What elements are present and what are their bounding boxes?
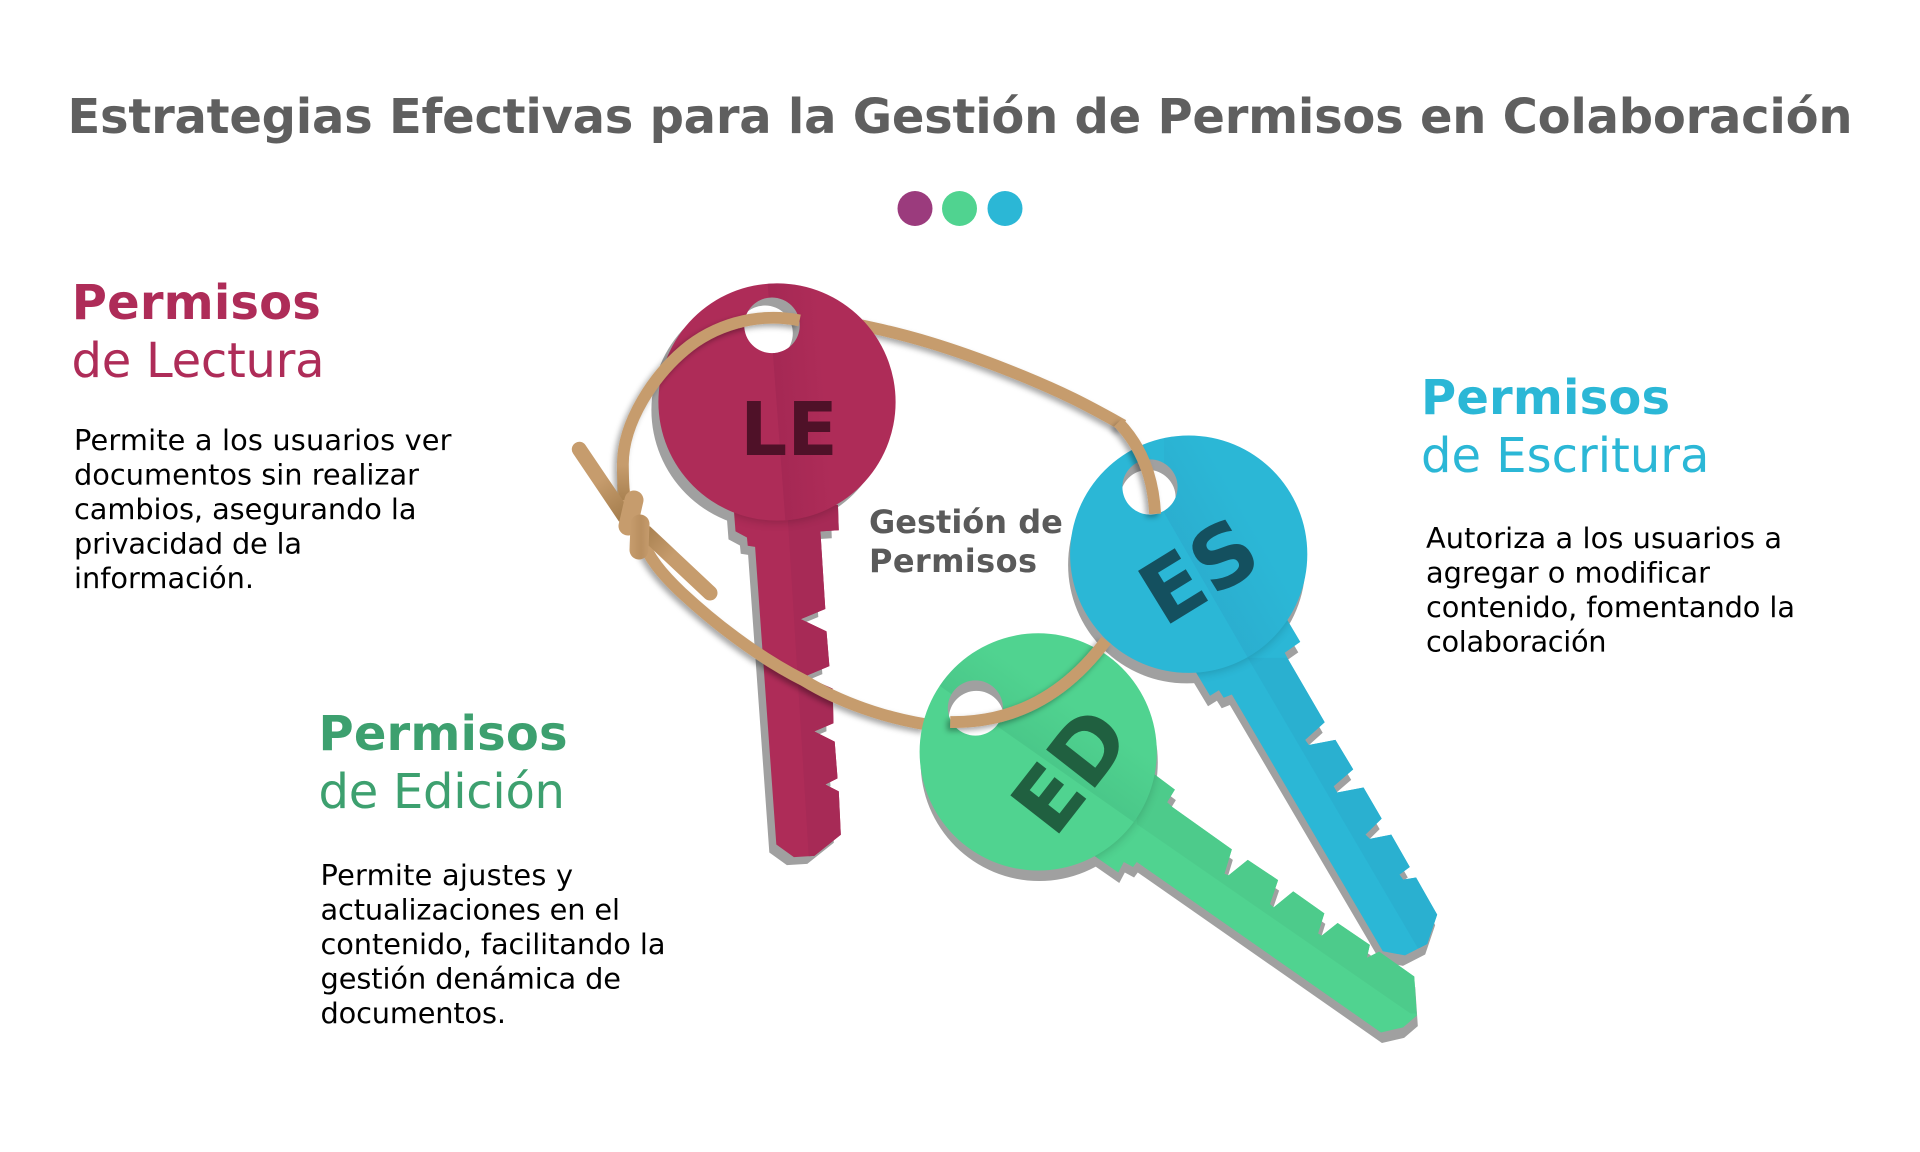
body text: Permite ajustes y (320, 858, 573, 892)
body text (320, 858, 666, 1030)
heading: de Lectura (72, 333, 324, 389)
panel: permisos de escritura (1421, 370, 1795, 658)
panel: permisos de edicion (318, 706, 666, 1030)
body text (74, 423, 452, 595)
body text (1426, 521, 1795, 658)
heading: de Escritura (1421, 428, 1709, 484)
center label (869, 503, 1063, 580)
key shaft (1192, 609, 1437, 955)
decorative three-dot row (898, 191, 1022, 226)
head fold shading (768, 283, 801, 520)
key shaft (1085, 769, 1417, 1032)
key shaft (733, 505, 841, 857)
key letters ES: ES (1123, 499, 1277, 646)
body text: documentos. (320, 996, 506, 1030)
key: LE lectura (651, 275, 900, 865)
body text: contenido, facilitando la (320, 927, 666, 961)
key letters ED: ED (993, 690, 1150, 853)
center label: Permisos (869, 542, 1037, 580)
shaft fold shading (1196, 620, 1438, 948)
heading: Permisos (318, 706, 568, 762)
key head (920, 633, 1157, 870)
head fold shading (940, 664, 1142, 822)
rope: lower strand (641, 538, 927, 724)
rope tails and knot (579, 449, 710, 593)
body text: contenido, fomentando la (1426, 590, 1795, 624)
shaft fold shading (734, 504, 841, 856)
key shadow (651, 291, 889, 865)
panel: permisos de lectura (72, 275, 452, 595)
body text: Permite a los usuarios ver (74, 423, 452, 457)
key shadow (1068, 446, 1435, 966)
shaft fold shading (1095, 774, 1417, 1014)
head fold shading (1164, 498, 1250, 656)
key head (1070, 435, 1307, 673)
rope: strands over key heads (623, 318, 1155, 722)
body text: privacidad de la (74, 526, 302, 560)
key shadow (921, 644, 1418, 1043)
key: ES escritura (1068, 400, 1492, 966)
heading: Permisos (72, 275, 321, 331)
body text: documentos sin realizar (74, 458, 419, 492)
rope: upper strand between keys (861, 325, 1123, 425)
body text: información. (74, 561, 254, 595)
center label: Gestión de (869, 503, 1063, 541)
heading: Permisos (1421, 370, 1670, 426)
key head (658, 283, 896, 521)
body text: Autoriza a los usuarios a (1426, 521, 1782, 555)
key letters LE: LE (740, 387, 838, 473)
heading: de Edición (318, 764, 565, 820)
body text: colaboración (1426, 624, 1606, 658)
title: Estrategias Efectivas para la Gestión de Permisos en Colaboración (68, 89, 1852, 145)
body text: agregar o modificar (1426, 556, 1710, 590)
body text: cambios, asegurando la (74, 492, 416, 526)
key: ED edicion (920, 600, 1455, 1043)
body text: gestión denámica de (320, 962, 621, 996)
body text: actualizaciones en el (320, 892, 620, 926)
